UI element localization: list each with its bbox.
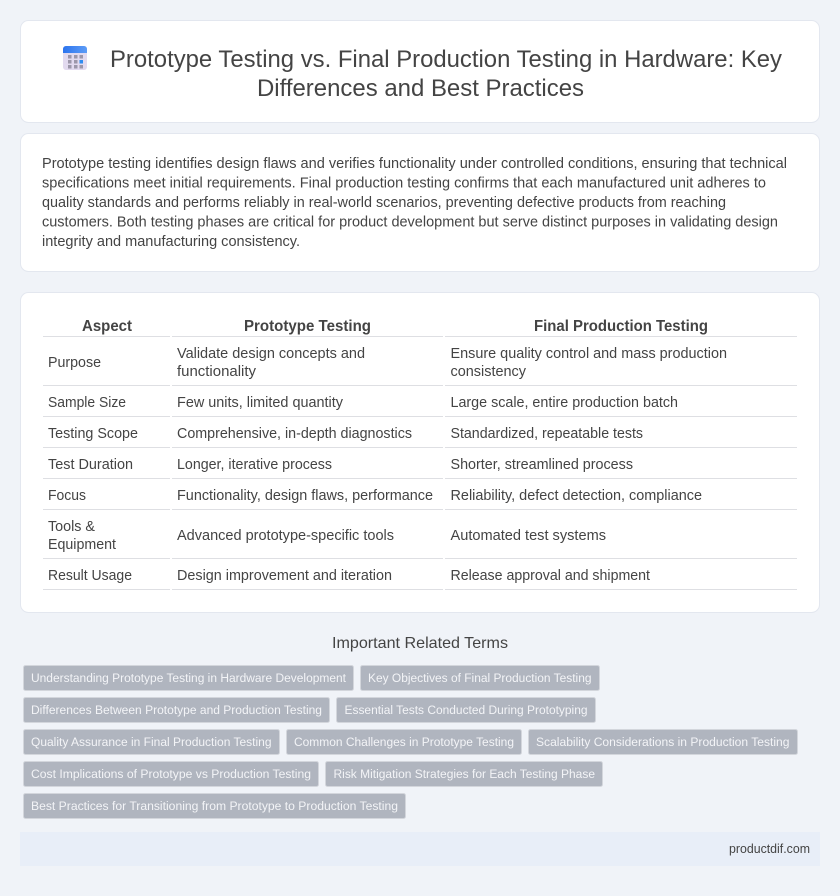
table header row: Aspect [82, 318, 133, 335]
table row: result usage [48, 568, 650, 584]
table row: test duration: Longer, iterative process [177, 457, 332, 473]
heading: important related terms: Important Related Terms [332, 635, 508, 652]
panel: introduction text: quality standards and performs reliably in real-world scenarios, preventing defective products from reaching [42, 195, 726, 211]
panel: related term chips [24, 666, 798, 818]
panel: related term chips: Best Practices for Transitioning from Prototype to Production Testing [31, 799, 398, 813]
table header row: Final Production Testing [534, 318, 708, 335]
table row: purpose: functionality [177, 364, 257, 380]
table row: test duration [48, 457, 633, 473]
table row: focus: Focus [48, 488, 86, 504]
panel: related term chips: Cost Implications of Prototype vs Production Testing [31, 767, 311, 781]
panel: related term chips: Understanding Prototype Testing in Hardware Development [31, 671, 347, 685]
panel: introduction text: Prototype testing identifies design flaws and verifies functionality under controlled conditions, ensuring that technical [42, 156, 787, 172]
panel: related term chips: Key Objectives of Final Production Testing [368, 671, 592, 685]
table row: result usage: Design improvement and iteration [177, 568, 392, 584]
table row: focus [48, 488, 702, 504]
panel: comparison table [20, 292, 820, 612]
panel: related term chips: Common Challenges in Prototype Testing [294, 735, 514, 749]
table row: purpose: Validate design concepts and [177, 346, 365, 362]
panel: introduction text: specifications meet initial requirements. Final production testing confirms that each manufactured unit adheres to [42, 176, 766, 192]
panel: introduction text: customers. Both testing phases are critical for product development but serve distinct purposes in validating design [42, 214, 778, 230]
table row: testing scope: Comprehensive, in-depth diagnostics [177, 426, 412, 442]
panel: related term chips: Risk Mitigation Strategies for Each Testing Phase [334, 767, 595, 781]
table row: purpose: consistency [450, 364, 527, 380]
table row: testing scope: Testing Scope [48, 426, 138, 442]
footer bar: productdif.com [729, 842, 810, 856]
table row: sample size: Large scale, entire production batch [450, 395, 678, 411]
title: Prototype Testing vs. Final Production Testing in Hardware: Key [110, 46, 782, 73]
footer bar [20, 832, 820, 866]
table row: purpose [48, 346, 727, 380]
table row: sample size [48, 395, 678, 411]
table row: result usage: Release approval and shipment [450, 568, 650, 584]
table row: purpose: Ensure quality control and mass production [450, 346, 727, 362]
panel: related term chips: Differences Between Prototype and Production Testing [31, 703, 322, 717]
table row: testing scope: Standardized, repeatable tests [450, 426, 643, 442]
table row: focus: Functionality, design flaws, performance [177, 488, 433, 504]
table row: focus: Reliability, defect detection, compliance [450, 488, 702, 504]
table row: sample size: Sample Size [48, 395, 126, 411]
table row: tools and equipment: Advanced prototype-specific tools [177, 528, 394, 544]
table row: test duration: Shorter, streamlined process [450, 457, 633, 473]
table row: tools and equipment: Tools & [48, 519, 95, 535]
icon: calendar grid [63, 46, 87, 70]
table row: tools and equipment: Automated test systems [450, 528, 606, 544]
title [110, 46, 782, 102]
panel: introduction text: integrity and manufacturing consistency. [42, 234, 300, 250]
table row: sample size: Few units, limited quantity [177, 395, 344, 411]
panel: related term chips: Quality Assurance in Final Production Testing [31, 735, 272, 749]
table row: result usage: Result Usage [48, 568, 132, 584]
panel: introduction text [20, 134, 820, 272]
table header row: Prototype Testing [244, 318, 371, 335]
panel: title header [20, 20, 820, 122]
table row: test duration: Test Duration [48, 457, 133, 473]
panel: related term chips: Scalability Considerations in Production Testing [536, 735, 790, 749]
table row: tools and equipment [48, 519, 606, 553]
table header row [82, 318, 708, 335]
table row: tools and equipment: Equipment [48, 537, 116, 553]
panel: related term chips: Essential Tests Conducted During Prototyping [344, 703, 588, 717]
title: Differences and Best Practices [257, 75, 584, 102]
table row: purpose: Purpose [48, 355, 101, 371]
table row: testing scope [48, 426, 643, 442]
